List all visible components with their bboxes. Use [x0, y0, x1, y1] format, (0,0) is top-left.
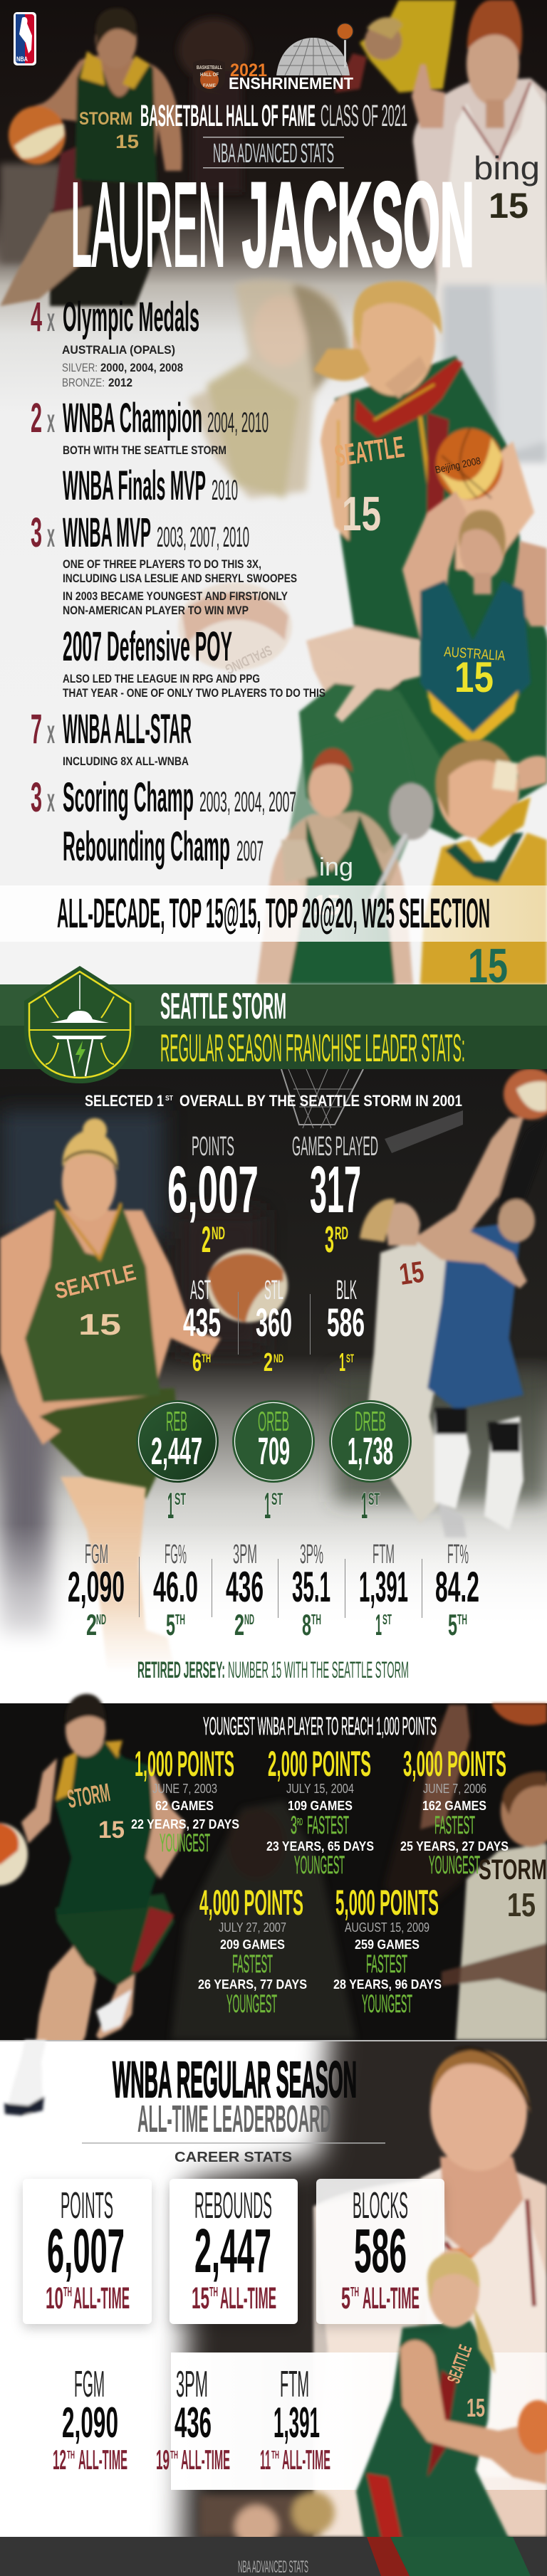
stat: Defensive POY: 2007 Defensive POY	[63, 624, 232, 670]
jersey lettering: bing 15	[474, 149, 540, 226]
milestone: 2,000 points: 23 YEARS, 65 DAYS	[266, 1839, 374, 1854]
stat badge: rebounds: ST	[174, 1490, 186, 1509]
text: WNBA Finals MVP	[63, 463, 206, 509]
photo: close-up player looking up in white jersey	[313, 2049, 547, 2537]
milestone: 3,000 points: 162 GAMES	[422, 1799, 486, 1813]
photo: player holding trophy in Seattle jersey	[256, 712, 434, 984]
milestone: 5,000 points: 259 GAMES	[355, 1938, 420, 1952]
milestone: 2,000 points	[266, 1744, 374, 1879]
stat row: shooting stats: 35.1	[292, 1563, 330, 1611]
jersey lettering: SEATTLE 15 lower: SEATTLE	[442, 2342, 476, 2386]
heading: WNBA regular season	[113, 2052, 357, 2140]
stat row: shooting stats: ND	[244, 1612, 254, 1628]
stat row: assists steals blocks: 360	[256, 1300, 292, 1345]
stat: free throws made all-time: 1,391	[274, 2399, 320, 2446]
stat: franchise points: 6,007	[167, 1152, 259, 1226]
card: rebounds: ALL-TIME	[220, 2281, 276, 2315]
photo: player in white Storm jersey, right	[420, 1703, 547, 2040]
text: 2010	[212, 475, 238, 506]
stat: Defensive POY: THAT YEAR - ONE OF ONLY TWO PLAYERS TO DO THIS	[63, 686, 325, 700]
stat: Rebounding Champ	[63, 824, 264, 870]
card: rebounds: 15	[192, 2281, 209, 2315]
stat row: shooting stats: 3P%	[300, 1540, 323, 1570]
stat: Olympic medals: 2012	[108, 376, 132, 389]
stat: WNBA MVP: 3	[31, 510, 42, 556]
photo: smiling player with medal in yellow jersey	[420, 740, 547, 984]
photo: basketball held	[207, 1248, 288, 1323]
stat badge: offensive rebounds: 709	[258, 1430, 290, 1473]
stat: field goals made all-time: 2,090	[62, 2399, 118, 2446]
jersey lettering: SEATTLE 15 olive	[52, 1259, 138, 1341]
jersey lettering: AUSTRALIA 15: AUSTRALIA	[444, 644, 506, 664]
stat: franchise points	[167, 1132, 259, 1261]
card: rebounds: TH	[209, 2285, 218, 2299]
milestone: 2,000 points: JULY 15, 2004	[286, 1782, 354, 1796]
jersey lettering: SEATTLE 15: Beijing 2008	[434, 455, 481, 475]
stat row: assists steals blocks: BLK	[336, 1276, 357, 1305]
milestone: 5,000 points: AUGUST 15, 2009	[345, 1920, 429, 1935]
jersey lettering: SEATTLE 15 lower	[442, 2342, 485, 2422]
icon: Hall of Fame logo and dome: 2021	[230, 61, 267, 80]
stat: field goals made all-time: FGM	[74, 2364, 105, 2405]
jersey lettering: STORM 15 white: 15	[507, 1886, 536, 1923]
jersey lettering: STORM 15: STORM	[79, 109, 132, 129]
stat badge: offensive rebounds	[232, 1400, 315, 1527]
fade to white below Storm photos	[0, 1523, 547, 1669]
stat: Olympic medals	[31, 294, 199, 389]
stat: WNBA MVP: ONE OF THREE PLAYERS TO DO THIS 3X,	[63, 557, 261, 571]
text: draft selection	[85, 1092, 462, 1110]
stat row: shooting stats: 3PM	[233, 1540, 257, 1570]
text: WNBA ALL-STAR	[63, 706, 192, 752]
stat: WNBA Finals MVP	[63, 463, 238, 509]
stat: Scoring Champ	[31, 774, 296, 821]
jersey lettering: STORM 15	[79, 109, 139, 152]
panel: honors band	[0, 885, 547, 942]
background: milestones section	[0, 1703, 547, 2040]
photo: Storm player dribbling, top left	[0, 8, 182, 306]
background: Seattle Storm section	[0, 1069, 547, 1704]
stat row: shooting stats: FG%	[165, 1540, 187, 1570]
photo: blurred crowd at bottom	[199, 2491, 335, 2548]
stat: WNBA Champion: x	[47, 402, 55, 439]
jersey lettering: SEATTLE 15 lower: 15	[467, 2393, 485, 2422]
stat: WNBA MVP: INCLUDING LISA LESLIE AND SHERYL SWOOPES	[63, 572, 297, 585]
jersey lettering: SEATTLE 15: SEATTLE	[333, 430, 406, 473]
photo: faded basketball	[178, 582, 292, 671]
stat row: shooting stats: 5	[166, 1608, 175, 1641]
icon: Hall of Fame logo and dome: HALL OF	[200, 73, 219, 78]
milestone: 5,000 points: 28 YEARS, 96 DAYS	[333, 1977, 442, 1992]
stat badge: offensive rebounds: ST	[271, 1490, 283, 1509]
photo: player in green Storm jersey dribbling	[0, 1694, 185, 2115]
stat: WNBA Champion: WNBA Champion	[63, 395, 202, 441]
card: rebounds	[170, 2179, 298, 2324]
stat row: shooting stats: 2	[234, 1608, 244, 1641]
stat badge: defensive rebounds: DREB	[355, 1407, 386, 1437]
stat: Olympic medals: SILVER:	[62, 361, 98, 374]
stat row: shooting stats: 2,090	[68, 1563, 125, 1611]
stat: franchise points: 2	[202, 1219, 211, 1261]
jersey lettering: bing 15: 15	[489, 186, 528, 226]
stat badge: rebounds: 2,447	[151, 1430, 202, 1473]
photo: hoop and net	[281, 1069, 463, 1153]
milestone: 5,000 points	[333, 1883, 442, 2018]
stat row: shooting stats: 2	[86, 1608, 97, 1641]
stat: field goals made all-time	[53, 2364, 127, 2476]
stat row: shooting stats: ND	[96, 1612, 106, 1628]
stat: WNBA All-Star: INCLUDING 8X ALL-WNBA	[63, 755, 189, 768]
stat badge: offensive rebounds: 1	[264, 1486, 271, 1527]
text: retired jersey: RETIRED JERSEY:	[137, 1657, 225, 1683]
stat row: assists steals blocks: STL	[264, 1276, 283, 1305]
photo: faded player looking up, profile	[189, 280, 349, 498]
milestone: 4,000 points: YOUNGEST	[226, 1990, 277, 2018]
stat: franchise points: POINTS	[192, 1132, 234, 1162]
milestone: 2,000 points: RD	[297, 1816, 303, 1827]
milestone: 4,000 points: JULY 27, 2007	[219, 1920, 286, 1935]
milestone: 2,000 points: YOUNGEST	[294, 1851, 345, 1879]
milestone: 3,000 points: JUNE 7, 2006	[423, 1782, 486, 1796]
panel: Seattle Storm header band: SEATTLE STORM	[160, 986, 286, 1027]
card: rebounds: 2,447	[194, 2217, 271, 2286]
jersey lettering: AUSTRALIA 15: 15	[454, 653, 494, 701]
stat: Olympic medals: AUSTRALIA (OPALS)	[62, 343, 175, 357]
icon: Hall of Fame logo and dome: ENSHRINEMENT	[229, 74, 353, 93]
text: 1,000 POINTS	[135, 1744, 234, 1784]
stat: franchise games played	[292, 1132, 378, 1261]
stat: free throws made all-time: 11	[260, 2445, 271, 2476]
milestone: 4,000 points: 26 YEARS, 77 DAYS	[198, 1977, 307, 1992]
milestone: 1,000 points: YOUNGEST	[160, 1829, 210, 1857]
stat row: assists steals blocks	[183, 1276, 365, 1377]
stat row: assists steals blocks: 435	[183, 1300, 221, 1345]
card: points: POINTS	[61, 2185, 113, 2227]
photo: dribbling player's lower leg and shoe	[4, 2040, 46, 2115]
stat row: shooting stats	[68, 1540, 479, 1641]
jersey lettering: SEATTLE 15 olive: SEATTLE	[52, 1259, 138, 1304]
stat: free throws made all-time: FTM	[280, 2364, 309, 2405]
title: Basketball Hall of Fame class of 2021	[140, 99, 407, 133]
stat row: shooting stats: FT%	[447, 1540, 469, 1570]
stat: Scoring Champ: x	[47, 782, 55, 819]
icon: Hall of Fame logo and dome: BASKETBALL	[197, 65, 223, 70]
icon: Seattle Storm logo	[24, 966, 135, 1083]
stat: field goals made all-time: 12	[53, 2445, 66, 2476]
jersey lettering: ing 15: 15	[313, 890, 340, 921]
milestone: 3,000 points: 25 YEARS, 27 DAYS	[400, 1839, 509, 1854]
stat: three pointers made all-time: 19	[156, 2445, 170, 2476]
milestone: 3,000 points	[400, 1744, 509, 1879]
jersey lettering: bing 15: bing	[474, 149, 540, 186]
milestone: 2,000 points: 3	[291, 1812, 297, 1839]
stat: WNBA MVP: 2003, 2007, 2010	[157, 522, 249, 553]
jersey lettering: STORM 15: 15	[115, 131, 139, 152]
text: REBOUNDS	[194, 2185, 272, 2227]
text: NBA ADVANCED STATS	[213, 139, 334, 169]
stat badge: defensive rebounds: 1	[361, 1486, 368, 1527]
photo: player in green Seattle jersey, lower right	[356, 2320, 547, 2576]
jersey lettering: AUSTRALIA 15	[444, 644, 506, 701]
card: blocks: 5	[341, 2281, 350, 2315]
stat row: assists steals blocks: 586	[327, 1300, 365, 1345]
stat: Olympic medals: 4	[31, 294, 42, 340]
milestone: 2,000 points: 109 GAMES	[288, 1799, 353, 1813]
text: 2007	[236, 836, 264, 867]
stat row: shooting stats: 84.2	[435, 1563, 479, 1611]
stat row: shooting stats: TH	[175, 1612, 185, 1628]
photo: player in Australia teal jersey shooting	[402, 491, 547, 747]
text: ALL-TIME	[78, 2445, 127, 2476]
text: CLASS OF 2021	[321, 99, 407, 133]
stat row: assists steals blocks: 2	[264, 1347, 273, 1377]
milestone: 1,000 points: JUNE 7, 2003	[152, 1782, 217, 1796]
divider and subheading: career stats: CAREER STATS	[174, 2150, 292, 2165]
photo: large player in green Seattle jersey	[299, 281, 547, 854]
stat: WNBA All-Star: 7	[31, 706, 42, 752]
card: points	[23, 2179, 152, 2324]
text: draft selection: OVERALL BY THE SEATTLE STORM IN 2001	[179, 1092, 462, 1110]
jersey lettering: SEATTLE 15 olive: 15	[78, 1308, 121, 1341]
card: points: TH	[63, 2285, 72, 2299]
stat: free throws made all-time	[260, 2364, 330, 2476]
card: points: 6,007	[47, 2217, 125, 2286]
stat row: assists steals blocks: 1	[339, 1347, 345, 1377]
stat: three pointers made all-time: 436	[174, 2399, 212, 2446]
stat row: shooting stats: TH	[311, 1612, 321, 1628]
icon: Hall of Fame logo and dome: FAME	[203, 84, 216, 88]
text: ALL-TIME	[282, 2445, 330, 2476]
milestone: 2,000 points: FASTEST	[307, 1812, 349, 1839]
stat: franchise points: ND	[212, 1224, 225, 1244]
stat badge: rebounds: REB	[166, 1407, 187, 1437]
jersey number: 15: 15	[397, 1255, 426, 1291]
jersey lettering: STORM 15 green: 15	[98, 1817, 125, 1844]
stat row: assists steals blocks: ST	[346, 1352, 354, 1365]
panel: Seattle Storm header band	[0, 984, 547, 1070]
stat badge: rebounds	[136, 1400, 219, 1527]
stat row: shooting stats: FGM	[85, 1540, 108, 1570]
stat: Rebounding Champ: Rebounding Champ	[63, 824, 230, 870]
stat: WNBA MVP: IN 2003 BECAME YOUNGEST AND FIRST/ONLY	[63, 589, 288, 603]
text: 2003, 2004, 2007	[199, 787, 296, 818]
text: GAMES PLAYED	[292, 1132, 378, 1162]
stat: franchise games played: 3	[325, 1219, 334, 1261]
stat: WNBA All-Star: x	[47, 713, 55, 750]
stat badge: defensive rebounds	[329, 1400, 412, 1527]
text: ALL-TIME	[181, 2445, 230, 2476]
stat: Olympic medals: x	[47, 301, 55, 338]
stat row: assists steals blocks: AST	[190, 1276, 211, 1305]
jersey lettering: ing 15	[313, 852, 353, 921]
milestone: 4,000 points: FASTEST	[232, 1950, 273, 1978]
stat row: shooting stats: 436	[226, 1563, 264, 1611]
photo: player in white Bing jersey, top right	[412, 0, 547, 342]
stat badge: rebounds: 1	[167, 1486, 174, 1527]
card: points: ALL-TIME	[73, 2281, 130, 2315]
photo: leg fading into white	[61, 1477, 174, 1669]
text: Olympic Medals	[63, 294, 199, 340]
photo: Australia player in yellow, top centre-right	[335, 0, 456, 93]
icon: Hall of Fame logo and dome	[193, 23, 353, 95]
text: 4,000 POINTS	[199, 1883, 303, 1923]
stat: WNBA Champion	[31, 395, 269, 457]
stat: Scoring Champ: 3	[31, 774, 42, 821]
text: draft selection: ST	[165, 1095, 173, 1103]
stat row: shooting stats: 5	[448, 1608, 457, 1641]
text: 2,000 POINTS	[268, 1744, 371, 1784]
text: draft selection: SELECTED 1	[85, 1092, 164, 1110]
jersey lettering: STORM 15 green: STORM	[65, 1777, 112, 1814]
heading: player name: LAUREN	[71, 159, 226, 291]
stat: WNBA MVP: NON-AMERICAN PLAYER TO WIN MVP	[63, 604, 249, 617]
stat: franchise games played: 317	[310, 1152, 361, 1226]
stat row: shooting stats: FTM	[373, 1540, 395, 1570]
stat: Defensive POY	[63, 624, 325, 700]
panel: stat band	[171, 2352, 547, 2490]
icon: NBA logo	[14, 12, 36, 65]
jersey lettering: SEATTLE 15	[333, 430, 481, 541]
faded basketball lettering: SPALDING	[222, 641, 274, 677]
milestone: 4,000 points: 209 GAMES	[220, 1938, 285, 1952]
stat: three pointers made all-time	[156, 2364, 230, 2476]
stat badge: defensive rebounds: 1,738	[348, 1430, 393, 1473]
stat badge: defensive rebounds: ST	[368, 1490, 380, 1509]
stat: three pointers made all-time: 3PM	[176, 2364, 208, 2405]
stat: Olympic medals: BRONZE:	[62, 376, 105, 389]
photo: blurred crowd and shadow hand behind title	[0, 18, 249, 263]
jersey lettering: STORM 15 green	[65, 1777, 125, 1844]
photo: faded player behind milestones	[171, 1708, 470, 2040]
background: hero and achievements	[0, 0, 547, 984]
stat: WNBA Champion: 2	[31, 395, 42, 441]
photo: lower player's head over blocks card	[427, 2249, 495, 2374]
stat: WNBA MVP: WNBA MVP	[63, 510, 151, 556]
milestone: 1,000 points	[131, 1744, 239, 1857]
card: blocks: ALL-TIME	[363, 2281, 420, 2315]
stat: WNBA Champion: BOTH WITH THE SEATTLE STORM	[63, 443, 226, 457]
jersey lettering: STORM 15 white	[479, 1854, 547, 1923]
stat: franchise games played: RD	[335, 1224, 348, 1244]
jersey lettering: SEATTLE 15: 15	[342, 487, 381, 541]
photo: blurred crowd	[0, 1110, 547, 1637]
stat: WNBA MVP: x	[47, 517, 55, 554]
photo: blocked shot, right side players	[360, 1068, 547, 1537]
card: blocks: TH	[350, 2285, 359, 2299]
stat row: assists steals blocks: TH	[202, 1352, 211, 1365]
jersey lettering: ing 15: ing	[319, 852, 353, 881]
milestone: 5,000 points: YOUNGEST	[362, 1990, 412, 2018]
milestone: 3,000 points: FASTEST	[434, 1812, 475, 1839]
stat: field goals made all-time: TH	[67, 2449, 75, 2461]
footer bar	[0, 2537, 547, 2576]
stat row: shooting stats: 1,391	[359, 1563, 408, 1611]
jersey number: 15 green: 15	[468, 939, 508, 993]
stat: WNBA MVP	[31, 510, 297, 617]
stat row: shooting stats: 46.0	[153, 1563, 198, 1611]
milestone: 1,000 points: 62 GAMES	[155, 1799, 214, 1813]
stat: WNBA All-Star	[31, 706, 192, 768]
card: points: 10	[46, 2281, 63, 2315]
photo: hand reaching	[313, 641, 420, 722]
stat: three pointers made all-time: TH	[170, 2449, 178, 2461]
text: 2004, 2010	[207, 407, 269, 438]
photo: faded grey player, upper right	[443, 285, 547, 463]
stat row: shooting stats: 1	[375, 1608, 382, 1641]
stat badge: offensive rebounds: OREB	[258, 1407, 289, 1437]
stat: Defensive POY: ALSO LED THE LEAGUE IN RPG AND PPG	[63, 672, 260, 685]
milestone: 4,000 points	[198, 1883, 307, 2018]
stat row: assists steals blocks: 6	[192, 1347, 202, 1377]
stat: Olympic medals: 2000, 2004, 2008	[100, 361, 183, 374]
stat row: shooting stats: 8	[302, 1608, 311, 1641]
photo: Lauren Jackson in olive Seattle jersey	[0, 1118, 221, 1498]
card: blocks	[316, 2179, 444, 2324]
stat row: assists steals blocks: ND	[274, 1352, 283, 1365]
milestone: 5,000 points: FASTEST	[366, 1950, 407, 1978]
stat row: shooting stats: TH	[457, 1612, 467, 1628]
icon: NBA logo: NBA	[16, 56, 28, 63]
stat: Scoring Champ: Scoring Champ	[63, 774, 194, 821]
stat row: shooting stats: ST	[382, 1612, 392, 1628]
background: leaderboard section	[0, 2040, 547, 2537]
card: blocks: BLOCKS	[353, 2185, 408, 2227]
card: blocks: 586	[354, 2217, 407, 2286]
milestone: 1,000 points: 22 YEARS, 27 DAYS	[131, 1817, 239, 1831]
stat: free throws made all-time: TH	[271, 2449, 279, 2461]
